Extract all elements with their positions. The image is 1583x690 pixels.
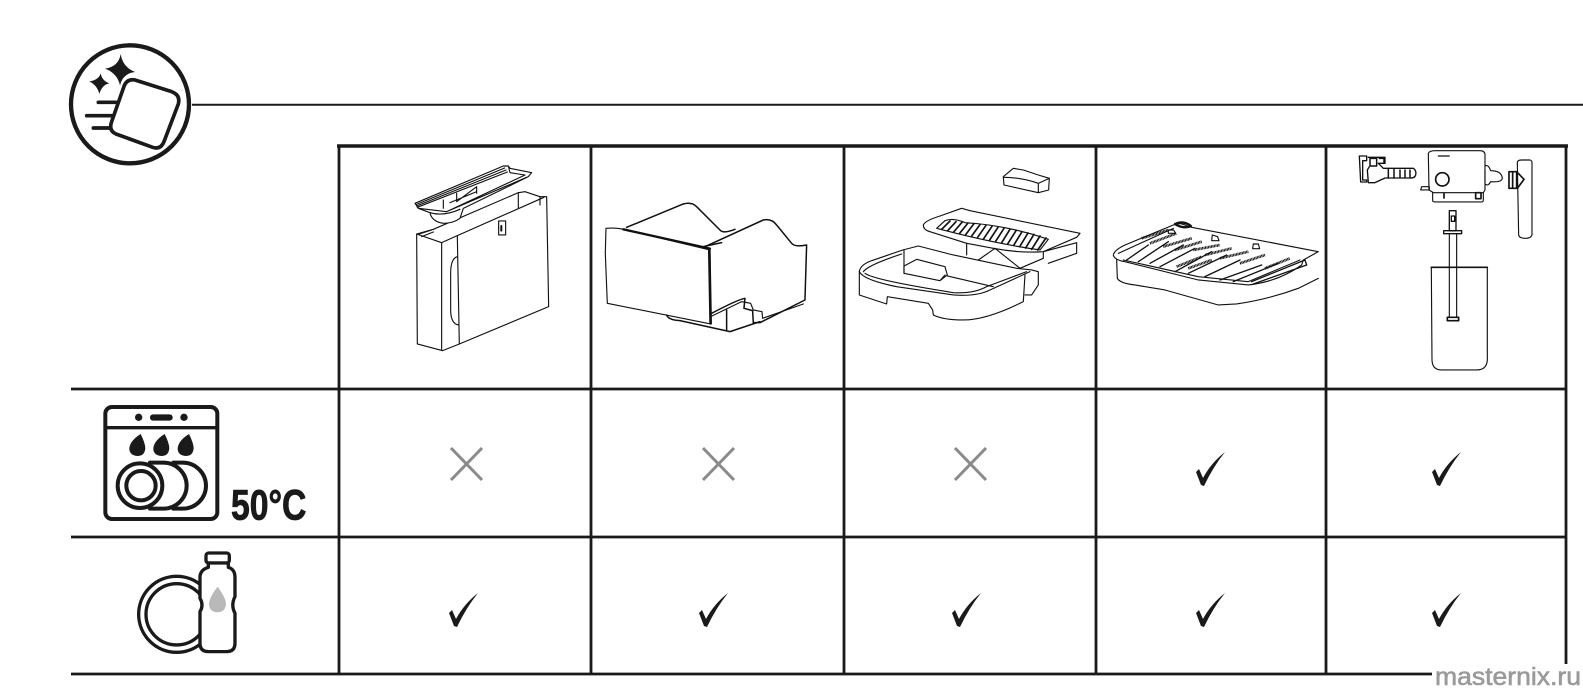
check row 1 column 4 [1196, 452, 1225, 486]
cross column 1 [451, 448, 482, 480]
part 3: drip tray with grille and float [859, 168, 1080, 320]
check row 1 column 5 [1432, 452, 1461, 486]
icon: plate and detergent bottle [139, 553, 235, 652]
part 5: pump, valve, hose and tank [1359, 151, 1532, 370]
cross column 2 [703, 448, 734, 480]
check row 2 column 1 [449, 593, 478, 627]
icon: cleaning sponge with sparkles [71, 45, 189, 163]
cross column 3 [955, 448, 986, 480]
row 1: unsuitable marks [451, 448, 986, 480]
check row 2 column 5 [1432, 593, 1461, 627]
tank lid [415, 166, 532, 223]
check row 2 column 4 [1196, 593, 1225, 627]
temperature label: 50°C [231, 481, 306, 529]
tank body [417, 192, 549, 351]
part 1: water tank with lid [415, 166, 549, 351]
table grid [71, 105, 1583, 675]
tray [859, 246, 1038, 320]
part 2: drip container [605, 203, 807, 332]
check row 2 column 3 [952, 593, 981, 627]
icon: dishwasher 50°C [105, 407, 306, 529]
float [1003, 168, 1049, 193]
grille plate [923, 208, 1080, 268]
check row 2 column 2 [699, 593, 728, 627]
part 4: drip grille tray [1113, 222, 1318, 305]
